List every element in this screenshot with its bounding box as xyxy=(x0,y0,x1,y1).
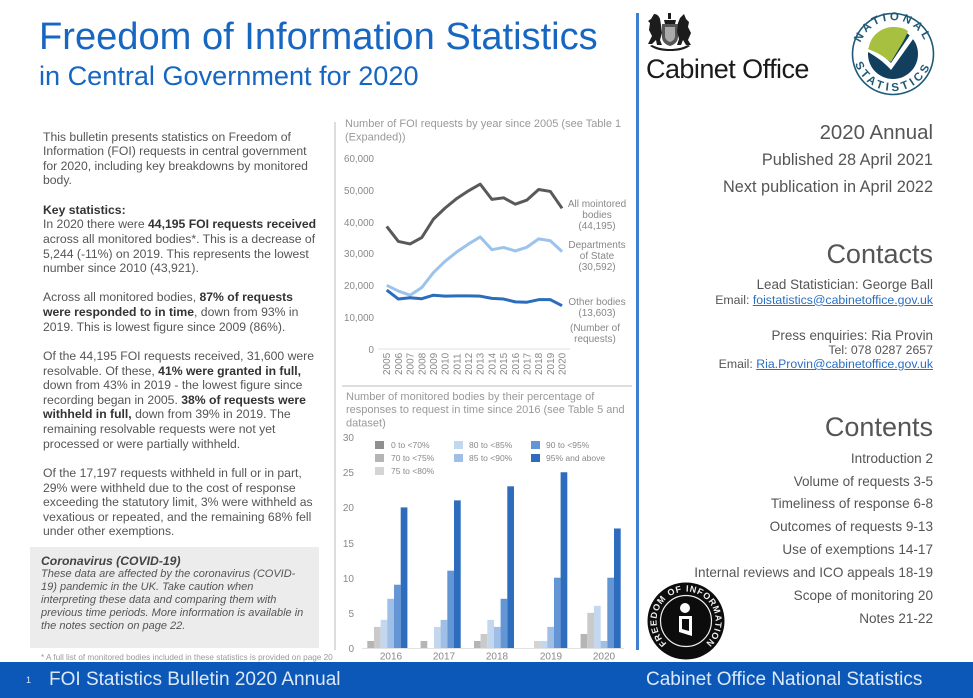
callout body: 19) pandemic in the UK. Take caution when xyxy=(41,580,253,592)
x axis year labels: 2013 xyxy=(476,352,487,375)
line chart title: (Expanded)) xyxy=(345,132,406,144)
text block: introduction and key statistics: withheld in full, down from 39% in 2019. The xyxy=(43,407,291,421)
text block: introduction and key statistics: Of the 44,195 FOI requests received, 31,600 were xyxy=(43,349,314,363)
edition: 2020 Annual xyxy=(820,122,933,144)
text block: introduction and key statistics: were responded to in time, down from 93% in xyxy=(43,305,298,319)
y axis labels: 0 xyxy=(348,644,354,655)
text block: introduction and key statistics: down from 43% in 2019 - the lowest figure since xyxy=(43,378,302,392)
y axis labels: 20,000 xyxy=(344,281,375,292)
series direct labels: bodies xyxy=(582,210,612,221)
contents list: Scope of monitoring 20 xyxy=(794,588,933,603)
text block: introduction and key statistics: 29% were withheld due to the cost of response xyxy=(43,480,296,494)
text block: introduction and key statistics: vexatious or repeated, and the remaining 68% fell xyxy=(43,510,311,524)
x axis year labels: 2017 xyxy=(522,352,534,375)
contents list: Timeliness of response 6-8 xyxy=(771,496,933,511)
callout body: the notes section on page 22. xyxy=(41,620,185,632)
x axis year labels: 2019 xyxy=(540,652,563,662)
y axis labels: 0 xyxy=(369,345,375,356)
contact: press enquiries: Press enquiries: Ria Provin xyxy=(772,328,933,343)
text block: introduction and key statistics: under other exemptions. xyxy=(43,524,174,538)
series direct labels: Departments xyxy=(568,240,626,251)
x axis year labels xyxy=(380,652,616,662)
contents list: Outcomes of requests 9-13 xyxy=(770,519,933,534)
x axis year labels: 2020 xyxy=(593,652,616,662)
contents list: Notes 21-22 xyxy=(859,611,933,626)
footer bar xyxy=(0,662,973,698)
legend: 95% and above xyxy=(546,453,605,463)
y axis labels: 30,000 xyxy=(344,249,375,260)
contact: press enquiries: Email: Ria.Provin@cabinetoffice.gov.uk xyxy=(719,357,933,371)
series direct labels: of State xyxy=(580,251,615,262)
series direct labels: (Number of xyxy=(570,323,620,334)
x axis year labels: 2006 xyxy=(394,352,405,375)
text block: introduction and key statistics: number since 2010 (43,921). xyxy=(43,261,199,275)
x axis year labels: 2019 xyxy=(546,352,557,375)
legend: 0 to <70% xyxy=(391,440,430,450)
series direct labels: (13,603) xyxy=(578,308,616,319)
subtitle: in Central Government for 2020 xyxy=(39,60,419,91)
legend: 70 to <75% xyxy=(391,453,435,463)
bar chart title: Number of monitored bodies by their percentage of xyxy=(346,391,594,403)
legend: 75 to <80% xyxy=(391,466,435,476)
contents list: Introduction 2 xyxy=(851,451,933,466)
text block: introduction and key statistics: exceeding the statutory limit, 3% were withheld as xyxy=(43,495,313,509)
text block: introduction and key statistics: 5,244 (-11%) on 2019. This represents the lowest xyxy=(43,246,309,260)
text block: introduction and key statistics: across all monitored bodies*. This is a decrease of xyxy=(43,232,315,246)
text block: introduction and key statistics: remaining resolvable requests were not yet xyxy=(43,422,275,436)
x axis year labels: 2018 xyxy=(486,652,509,662)
text block: introduction and key statistics: This bulletin presents statistics on Freedom of xyxy=(43,130,291,144)
x axis year labels: 2014 xyxy=(487,352,498,375)
logo text: Cabinet Office: Cabinet Office xyxy=(646,54,809,84)
next publication: Next publication in April 2022 xyxy=(723,178,933,196)
contact: lead statistician: Lead Statistician: George Ball xyxy=(757,277,933,292)
bar chart title: responses to request in time since 2016 (see Table 5 and xyxy=(346,404,625,416)
footnote: * A full list of monitored bodies included in these statistics is provided on page 20 xyxy=(41,653,333,662)
callout body: previous time periods. More information is available in xyxy=(41,606,303,618)
y axis labels xyxy=(344,154,375,356)
x axis year labels: 2016 xyxy=(380,652,403,662)
contents list: Volume of requests 3-5 xyxy=(794,474,933,488)
series direct labels: Other bodies xyxy=(568,297,626,308)
y axis labels: 30 xyxy=(343,433,354,444)
text block: introduction and key statistics xyxy=(43,130,316,538)
x axis year labels: 2011 xyxy=(452,353,463,375)
text block: introduction and key statistics: processed or were partially withheld. xyxy=(43,437,240,451)
text block: introduction and key statistics: Key statistics: xyxy=(43,203,126,217)
published date: Published 28 April 2021 xyxy=(762,151,933,169)
series: departments of state xyxy=(387,237,562,295)
series: all monitored bodies xyxy=(387,184,562,244)
series direct labels xyxy=(568,199,626,345)
vertical divider: grey xyxy=(334,122,336,650)
contents list xyxy=(694,451,933,626)
line chart title: Number of FOI requests by year since 2005 (see Table 1 xyxy=(345,118,621,130)
bars: 2017 xyxy=(421,500,461,648)
contact: lead statistician: Email: foistatistics@cabinetoffice.gov.uk xyxy=(715,293,933,307)
text block: introduction and key statistics: Across all monitored bodies, 87% of requests xyxy=(43,290,293,304)
series direct labels: requests) xyxy=(574,334,616,345)
text block: introduction and key statistics: for 2020, including key breakdowns by monitored xyxy=(43,159,308,173)
icon: freedom of information seal: FREEDOM OF INFORMATION xyxy=(650,585,722,648)
bars: 2016 xyxy=(367,507,407,648)
icon: national statistics badge: NATIONAL xyxy=(854,12,929,42)
series direct labels: All mointored xyxy=(568,199,626,210)
y axis labels: 15 xyxy=(343,539,354,550)
legend: 90 to <95% xyxy=(546,440,590,450)
bars: 2019 xyxy=(534,472,567,648)
callout body xyxy=(40,568,303,632)
text block: introduction and key statistics: resolvable. Of these, 41% were granted in full, xyxy=(43,364,301,378)
contact: press enquiries xyxy=(719,328,933,371)
x axis year labels: 2018 xyxy=(534,352,545,375)
bars: 2018 xyxy=(474,486,514,648)
x axis year labels: 2009 xyxy=(429,352,440,375)
y axis labels xyxy=(343,433,354,655)
contact: press enquiries: Tel: 078 0287 2657 xyxy=(828,343,933,357)
legend: 80 to <85% xyxy=(469,440,513,450)
bar chart title: dataset) xyxy=(346,417,386,429)
legend xyxy=(375,440,605,476)
x axis year labels: 2012 xyxy=(464,352,475,375)
x axis year labels: 2016 xyxy=(511,352,522,375)
x axis year labels: 2015 xyxy=(499,352,510,375)
x axis year labels: 2008 xyxy=(417,352,428,375)
callout body: These data are affected by the coronavirus (COVID- xyxy=(41,568,295,580)
horizontal divider: between charts xyxy=(342,385,632,386)
legend: 85 to <90% xyxy=(469,453,513,463)
y axis labels: 40,000 xyxy=(344,218,375,229)
panel: coronavirus callout xyxy=(30,547,319,648)
text block: introduction and key statistics: body. xyxy=(43,173,72,187)
x axis year labels: 2007 xyxy=(406,352,417,375)
heading: contacts: Contacts xyxy=(826,239,933,269)
y axis labels: 50,000 xyxy=(344,186,375,197)
callout body: interpreting these data and comparing them with xyxy=(41,594,276,606)
contact: lead statistician xyxy=(715,277,933,307)
series direct labels: (44,195) xyxy=(578,221,616,232)
page number: 1 xyxy=(26,675,31,685)
text block: introduction and key statistics: Of the 17,197 requests withheld in full or in part, xyxy=(43,466,302,480)
text block: introduction and key statistics: 2019. This is lowest figure since 2009 (86%). xyxy=(43,320,285,334)
text block: introduction and key statistics: Information (FOI) requests in central government xyxy=(43,144,306,158)
y axis labels: 60,000 xyxy=(344,154,375,165)
x axis year labels xyxy=(382,352,568,375)
contents list: Internal reviews and ICO appeals 18-19 xyxy=(694,565,933,580)
x axis year labels: 2020 xyxy=(558,352,568,375)
callout heading: Coronavirus (COVID-19) xyxy=(41,554,181,568)
title: Freedom of Information Statistics xyxy=(39,16,598,58)
text block: introduction and key statistics: In 2020 there were 44,195 FOI requests received xyxy=(43,217,316,231)
contents list: Use of exemptions 14-17 xyxy=(782,542,933,557)
y axis labels: 25 xyxy=(343,468,354,479)
text block: introduction and key statistics: recording began in 2005. 38% of requests were xyxy=(43,393,306,407)
series: other bodies xyxy=(387,290,562,306)
y axis labels: 10,000 xyxy=(344,313,375,324)
bars: 2020 xyxy=(581,528,621,648)
y axis labels: 5 xyxy=(348,609,354,620)
icon: royal crest xyxy=(648,13,691,51)
y axis labels: 20 xyxy=(343,503,354,514)
icon: national statistics badge xyxy=(852,12,934,96)
footer organisation: Cabinet Office National Statistics xyxy=(646,669,922,690)
vertical divider: blue xyxy=(636,13,638,650)
bars xyxy=(367,472,621,648)
x axis year labels: 2017 xyxy=(433,652,456,662)
footer title: FOI Statistics Bulletin 2020 Annual xyxy=(49,669,340,690)
publication details xyxy=(723,122,933,196)
x axis year labels: 2010 xyxy=(441,352,452,375)
series direct labels: (30,592) xyxy=(578,262,616,273)
heading: contents: Contents xyxy=(825,412,933,442)
series lines xyxy=(387,184,562,306)
icon: national statistics badge: STATISTICS xyxy=(856,62,929,92)
y axis labels: 10 xyxy=(343,574,354,585)
x axis year labels: 2005 xyxy=(382,352,393,375)
